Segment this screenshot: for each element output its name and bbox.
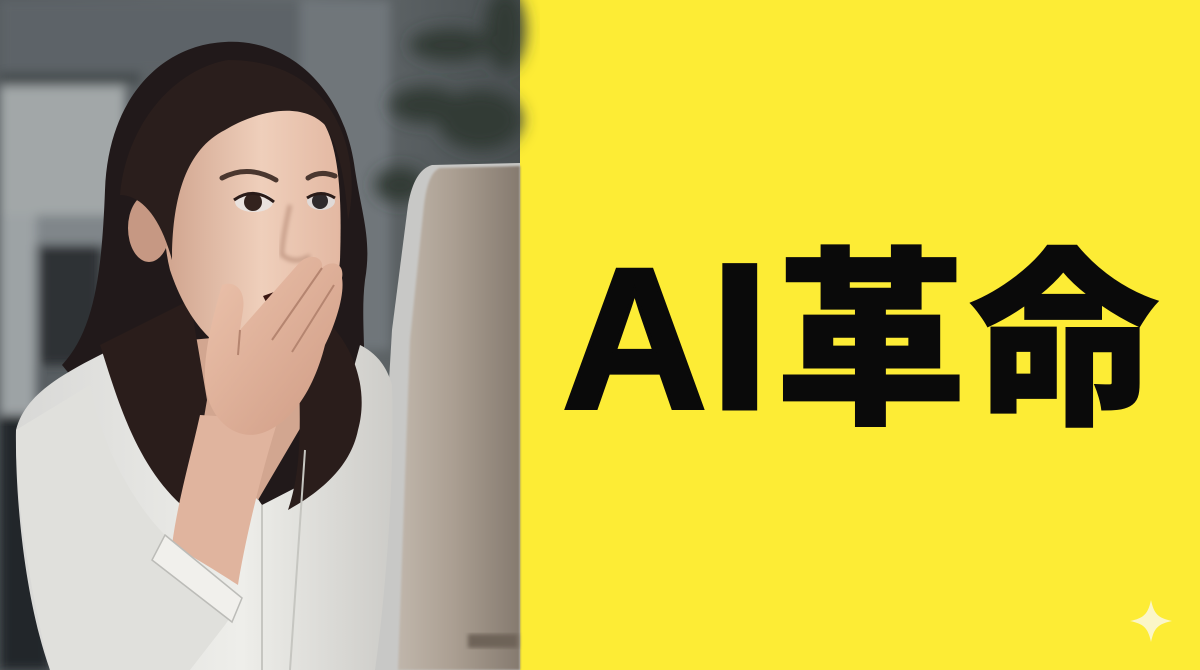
woman: forearm — [172, 415, 278, 585]
woman: hair lock right — [288, 300, 362, 510]
woman: finger lines — [238, 268, 334, 355]
title: AI革命: 命 — [969, 188, 1159, 463]
title: AI革命: I — [711, 221, 769, 452]
title: AI革命: A — [562, 226, 707, 451]
panel: photo of surprised woman at computer — [0, 0, 525, 670]
woman: shirt sleeve and cuff — [16, 385, 242, 670]
woman: hair back — [62, 42, 367, 508]
woman: eyes — [234, 192, 335, 212]
woman: mouth — [263, 288, 285, 308]
computer monitor — [372, 163, 520, 670]
woman: hand over mouth — [205, 257, 343, 435]
woman: face — [165, 105, 341, 360]
woman: shirt and torso — [16, 345, 393, 670]
background: blurred office shelves — [0, 0, 390, 670]
woman: front hair — [120, 60, 352, 260]
background: blurred plant — [375, 0, 525, 203]
woman: ear — [128, 194, 170, 262]
panel: yellow background — [520, 0, 1200, 670]
woman: hair lock left — [100, 300, 207, 512]
title: AI革命 — [562, 188, 1159, 463]
sparkle icon — [1130, 600, 1172, 642]
woman: eyebrows — [222, 171, 335, 180]
woman: neck and chest — [190, 330, 305, 500]
title: AI革命: 革 — [776, 188, 966, 463]
woman: nose shading — [282, 205, 310, 260]
woman: shirt placket — [262, 450, 305, 670]
